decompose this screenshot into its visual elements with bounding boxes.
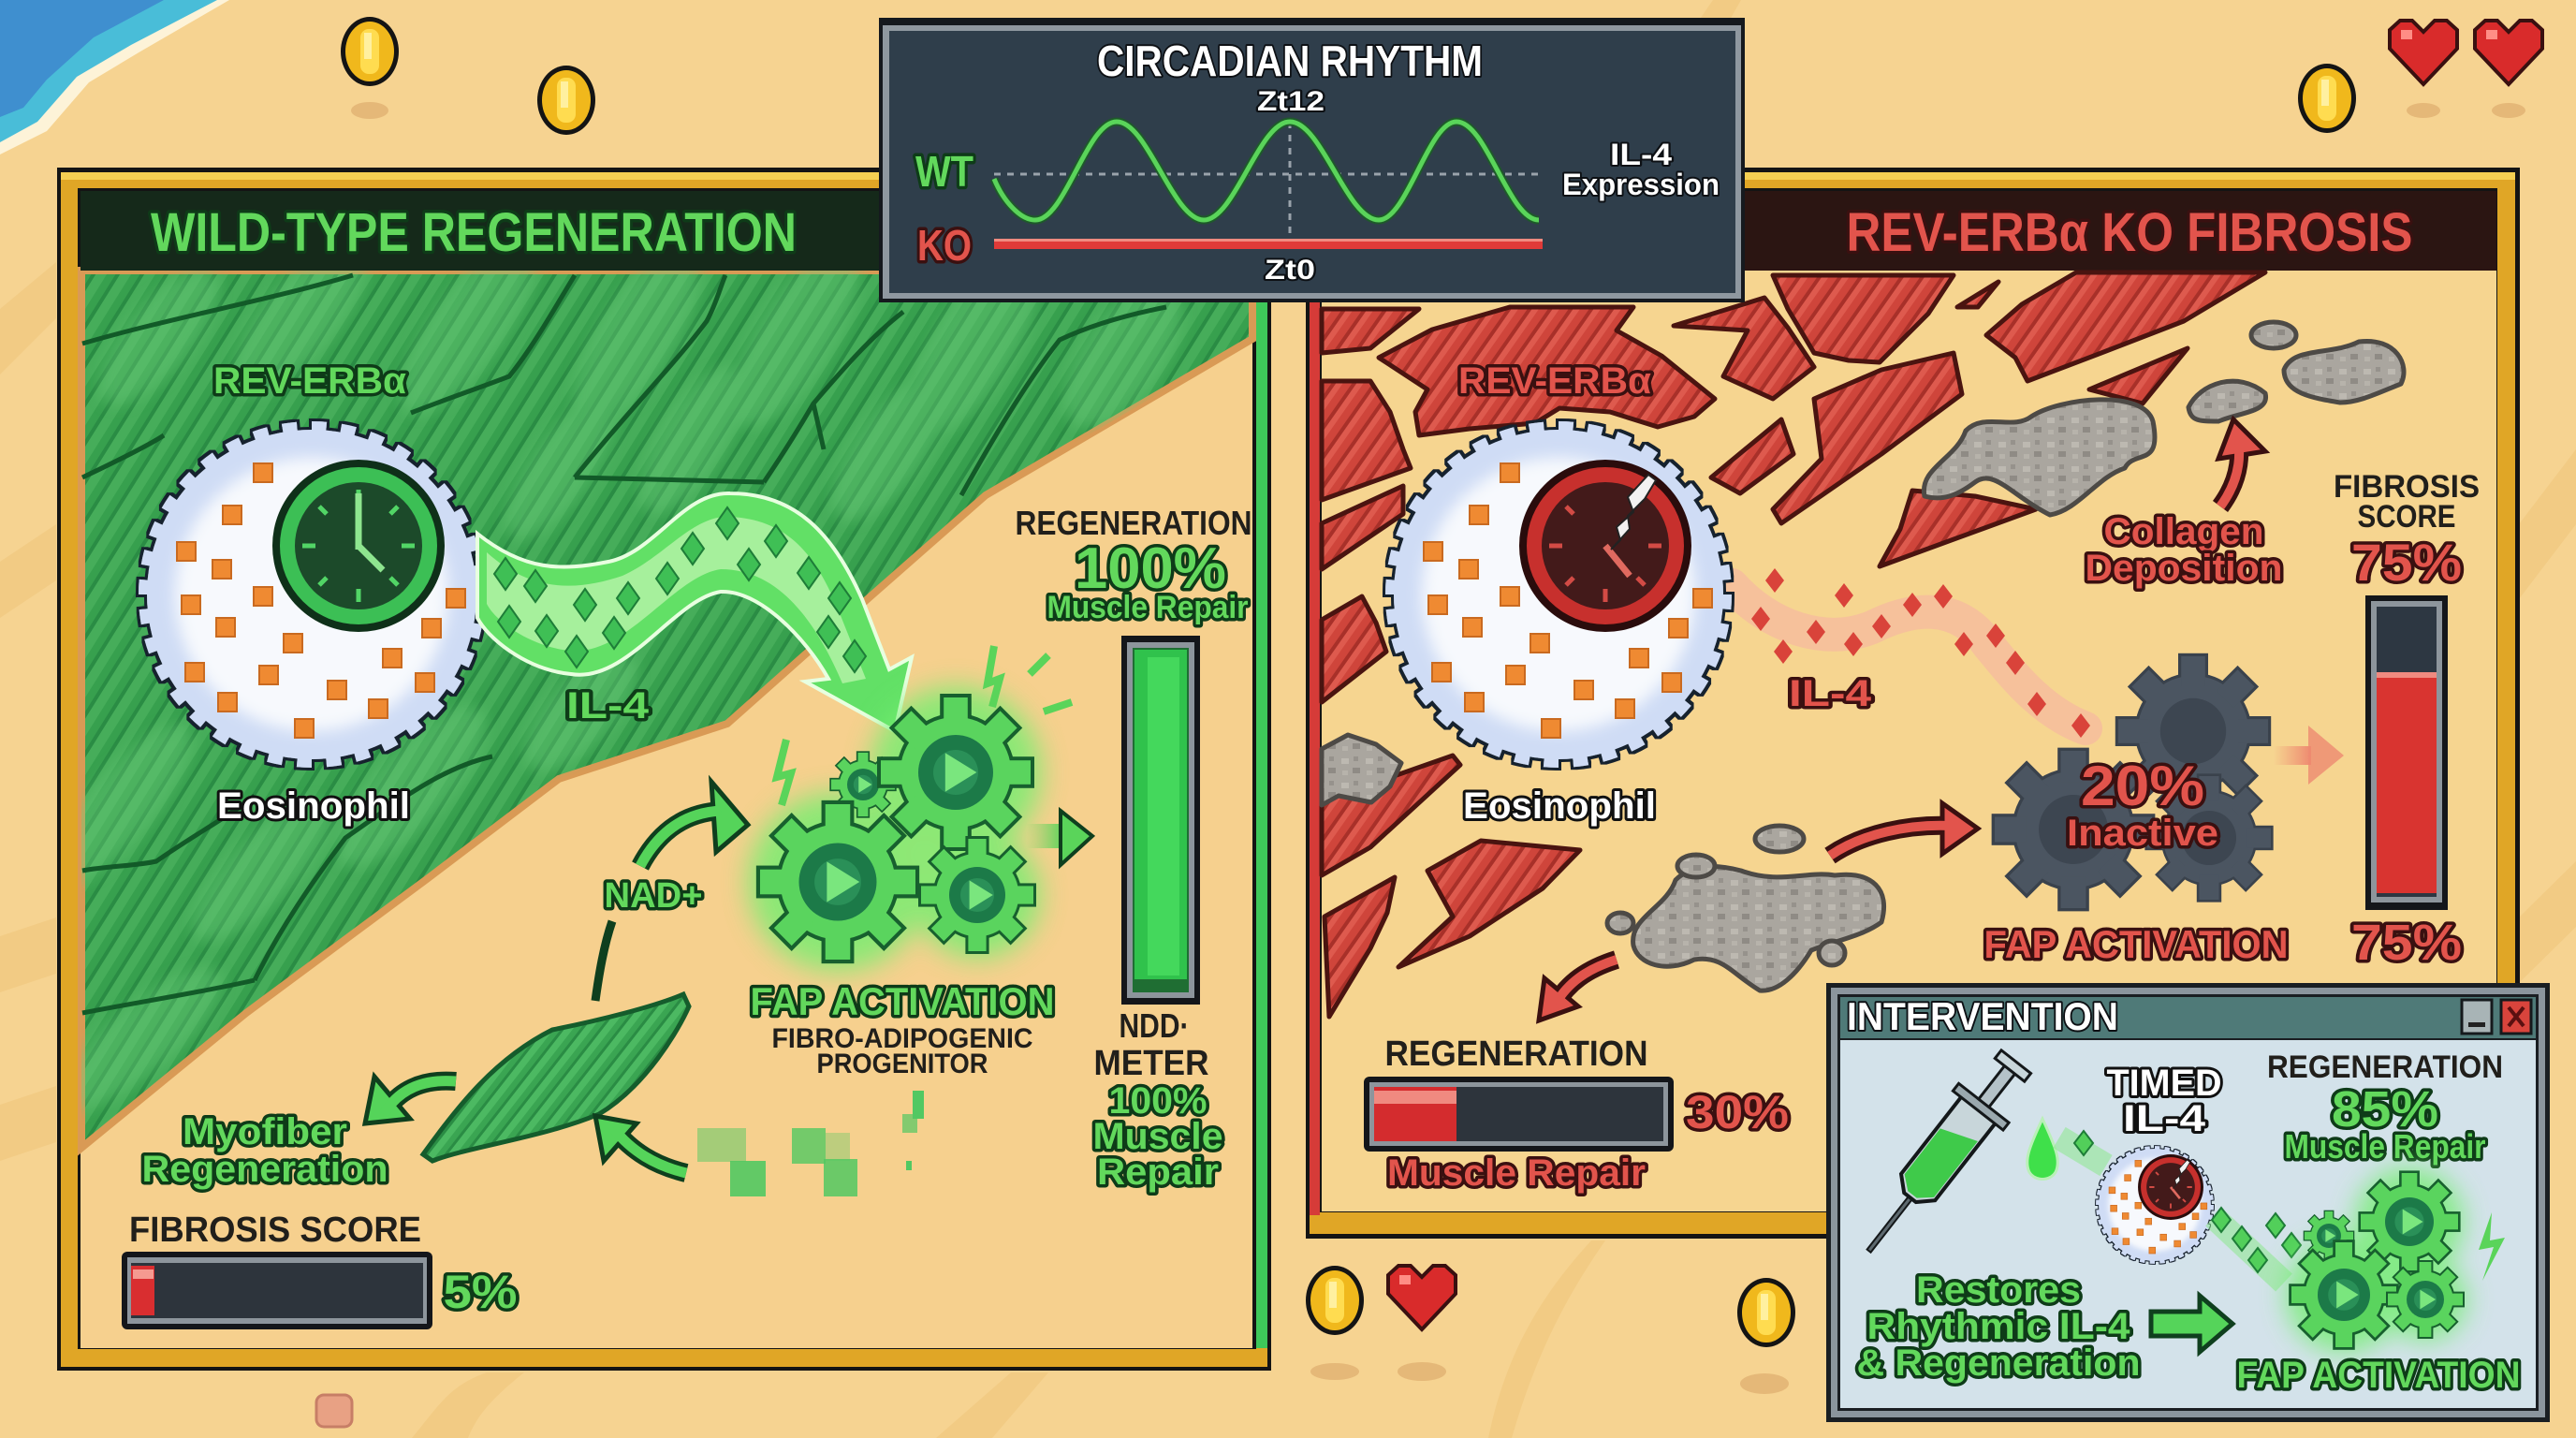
green drop [2027, 1119, 2057, 1180]
coin top left [341, 17, 399, 119]
label: FIBROSIS SCORE right: FIBROSIS [2334, 469, 2480, 505]
value: 5%: 5% [444, 1266, 517, 1318]
header bar left [80, 191, 1252, 271]
label: FIBROSIS SCORE right: SCORE [2357, 499, 2456, 535]
collagen deposits [1322, 322, 2404, 990]
label: TIMED IL-4: TIMED [2106, 1063, 2222, 1104]
coin bottom centre [1306, 1266, 1364, 1380]
green particles [2059, 1131, 2301, 1283]
label: TIMED IL-4 [2106, 1063, 2222, 1139]
chart grid lines [994, 122, 1544, 253]
label: NDD METER block: 100% [1108, 1080, 1208, 1122]
label: Zt0: Zt0 [1265, 255, 1315, 286]
label: restores rhythmic IL-4 and regeneration: Rhythmic IL-4 [1866, 1306, 2130, 1347]
chart title: CIRCADIAN RHYTHM [1097, 37, 1483, 85]
label: TIMED IL-4: IL-4 [2123, 1098, 2206, 1139]
value: 100%: 100% [1075, 536, 1226, 601]
window title bar [1840, 997, 2536, 1038]
label: IL-4 Expression [1562, 138, 1720, 201]
value: 20% inactive: Inactive [2067, 813, 2218, 854]
heart bottom centre [1388, 1266, 1456, 1381]
eosinophil cell right [1394, 430, 1723, 759]
shell [316, 1395, 352, 1427]
arrow: collagen to gears [1830, 803, 1978, 856]
label: IL-4 Expression: IL-4 [1610, 138, 1672, 171]
label: REGENERATION intervention: REGENERATION [2267, 1049, 2503, 1085]
label: collagen deposition: Deposition [2086, 548, 2282, 589]
value: 75% top: 75% [2351, 533, 2462, 592]
heart top right 2 [2475, 21, 2542, 118]
label: myofiber regeneration [142, 1111, 388, 1190]
label: fibro-adipogenic progenitor [771, 1023, 1033, 1079]
dissolving fragments [697, 1091, 924, 1196]
heart top right 1 [2390, 21, 2457, 118]
label: FIBROSIS SCORE right [2334, 469, 2480, 535]
label: Muscle Repair intervention: Muscle Repair [2284, 1127, 2486, 1166]
label: FAP ACTIVATION right: FAP ACTIVATION [1984, 922, 2288, 966]
label: collagen deposition [2086, 511, 2282, 589]
arrow: to gears [2151, 1296, 2232, 1352]
title: KO fibrosis: REV-ERBα KO FIBROSIS [1846, 202, 2413, 263]
label: Muscle Repair right: Muscle Repair [1387, 1152, 1646, 1194]
label: KO: KO [917, 221, 972, 270]
label: REGENERATION top: REGENERATION [1015, 504, 1252, 542]
label: Eosinophil right: Eosinophil [1463, 785, 1656, 827]
label: NDD METER block [1093, 1006, 1222, 1193]
coin top right [2298, 64, 2356, 133]
value: 85%: 85% [2332, 1081, 2438, 1137]
small eosinophil [2099, 1149, 2211, 1261]
KO flat line [994, 239, 1543, 249]
coin top centre left [537, 66, 595, 135]
label: restores rhythmic IL-4 and regeneration: & Regeneration [1857, 1343, 2140, 1384]
label: Muscle Repair top: Muscle Repair [1046, 590, 1249, 625]
panel frame left [57, 168, 1271, 1371]
label: FAP ACTIVATION left: FAP ACTIVATION [751, 979, 1054, 1023]
value: 20% inactive: 20% [2081, 755, 2204, 817]
label: FAP ACTIVATION intervention: FAP ACTIVATION [2237, 1355, 2520, 1396]
label: NDD METER block: NDD· [1120, 1006, 1189, 1045]
label: collagen deposition: Collagen [2104, 511, 2263, 552]
clock cracked [1519, 460, 1691, 632]
glowing FAP gears [748, 646, 1072, 972]
WT wave line [994, 122, 1539, 220]
arrow stem: myofiber to NAD+ [595, 921, 612, 1001]
fibrosis vertical meter [2365, 595, 2448, 910]
label: restores rhythmic IL-4 and regeneration [1857, 1269, 2140, 1384]
IL-4 stream arrow [477, 493, 912, 731]
close button [2501, 1000, 2531, 1034]
arrow: fragments to spindle [595, 1116, 686, 1173]
label: NAD+: NAD+ [605, 876, 702, 916]
window title: INTERVENTION [1847, 994, 2118, 1038]
label: WT: WT [915, 147, 973, 196]
arrow: gears to meter [1027, 811, 1092, 865]
clock healthy [272, 460, 445, 632]
arrow: collagen to regeneration [1539, 960, 1617, 1020]
label: fibro-adipogenic progenitor: FIBRO-ADIPOGENIC [771, 1023, 1033, 1054]
panel: intervention window [1826, 983, 2550, 1422]
panel frame right [1306, 168, 2520, 1239]
damaged muscle fragments [1322, 272, 2265, 1017]
label: NDD METER block: Muscle [1093, 1116, 1222, 1157]
IL-4 weak stream [1732, 568, 2090, 738]
regeneration vertical meter [1121, 636, 1200, 1005]
intervention gears [2286, 1167, 2505, 1353]
label: IL-4 right: IL-4 [1789, 673, 1872, 714]
myofiber spindle [423, 994, 689, 1161]
muscle tissue background [30, 222, 1252, 1148]
label: fibro-adipogenic progenitor: PROGENITOR [816, 1049, 988, 1079]
arrow: collagen up [2218, 419, 2265, 506]
label: NDD METER block: Repair [1097, 1152, 1219, 1193]
label: FIBROSIS SCORE: FIBROSIS SCORE [129, 1211, 421, 1250]
header bar right [1322, 191, 2496, 271]
arrow: spindle to label [365, 1077, 456, 1123]
panel: circadian rhythm chart [879, 18, 1745, 302]
label: IL-4 Expression: Expression [1562, 168, 1720, 201]
inactive FAP gears [1995, 656, 2271, 908]
panel: wild-type regeneration [30, 168, 1271, 1371]
syringe icon [1843, 1042, 2042, 1270]
arrow: faint to meter [2274, 726, 2344, 785]
label: myofiber regeneration: Myofiber [183, 1111, 347, 1152]
coin bottom right [1737, 1278, 1795, 1394]
value: 20% inactive [2067, 755, 2218, 854]
eosinophil cell left [147, 430, 476, 759]
label: NDD METER block: METER [1093, 1044, 1209, 1083]
label: REGENERATION right: REGENERATION [1385, 1034, 1647, 1074]
label: REV-ERBα left: REV-ERBα [213, 360, 406, 402]
label: Zt12: Zt12 [1257, 86, 1325, 117]
label: myofiber regeneration: Regeneration [142, 1149, 388, 1190]
value: 75% bottom: 75% [2351, 915, 2462, 971]
title: wild-type regeneration: WILD-TYPE REGENERATION [151, 202, 797, 263]
sea corner [0, 0, 229, 154]
regeneration bar 30% [1364, 1077, 1674, 1152]
label: restores rhythmic IL-4 and regeneration: Restores [1916, 1269, 2081, 1311]
label: Eosinophil left: Eosinophil [217, 785, 410, 827]
value: 30%: 30% [1686, 1086, 1789, 1138]
label: REV-ERBα right: REV-ERBα [1458, 360, 1651, 402]
fibrosis bar 5% [122, 1252, 432, 1329]
minimize button [2462, 1000, 2492, 1034]
panel: REV-ERBα KO fibrosis [1306, 168, 2520, 1239]
label: IL-4 left: IL-4 [566, 685, 650, 726]
arrow: NAD+ to gears [640, 782, 748, 866]
